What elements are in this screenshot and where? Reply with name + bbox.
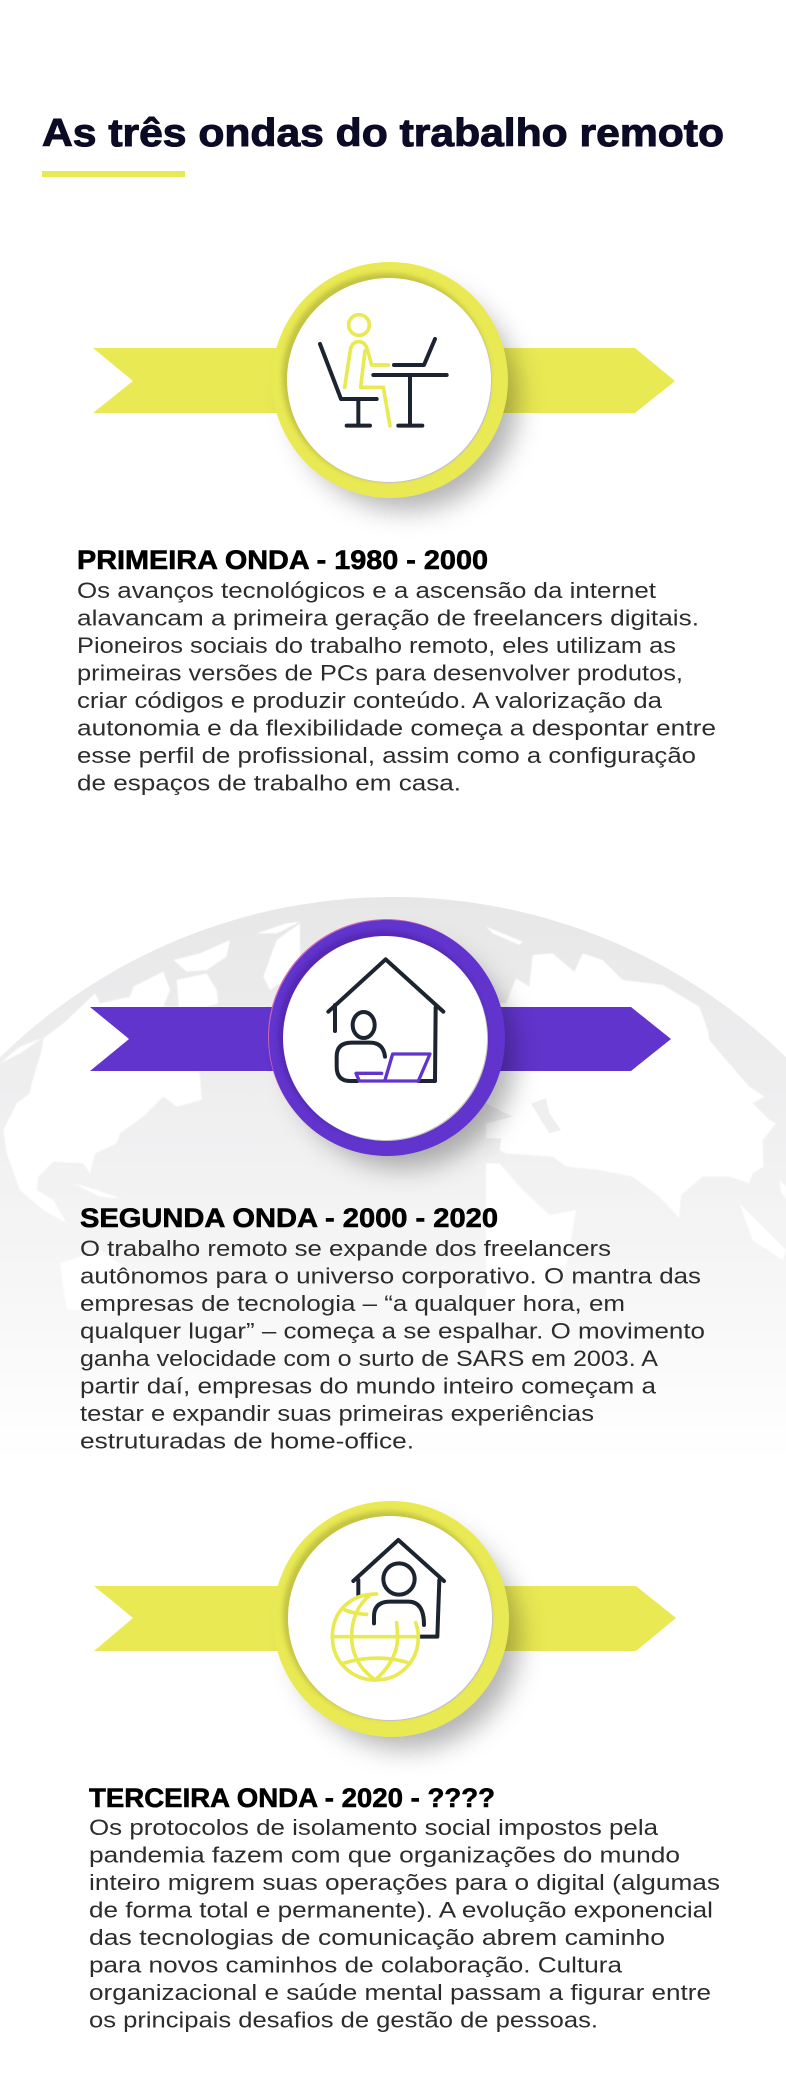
text block: primeira onda: Pioneiros sociais do trabalho remoto, eles utilizam as xyxy=(77,633,676,658)
text block: segunda onda: qualquer lugar” – começa a se espalhar. O movimento xyxy=(80,1318,705,1344)
text block: terceira onda: pandemia fazem com que organizações do mundo xyxy=(89,1842,680,1868)
badge: segunda onda xyxy=(268,919,515,1168)
text block: terceira onda: para novos caminhos de colaboração. Cultura xyxy=(89,1952,623,1978)
text block: segunda onda: partir daí, empresas do mundo inteiro começam a xyxy=(80,1374,657,1398)
text block: primeira onda: autonomia e da flexibilidade começa a despontar entre xyxy=(77,716,716,740)
text block: primeira onda: de espaços de trabalho em casa. xyxy=(77,770,461,796)
title: As três ondas do trabalho remoto xyxy=(42,112,724,155)
badge: primeira onda xyxy=(272,262,518,510)
text block: terceira onda xyxy=(89,1815,720,2032)
panel: segunda onda xyxy=(80,919,705,1454)
text block: segunda onda: O trabalho remoto se expande dos freelancers xyxy=(80,1236,611,1261)
icon: person at desk with laptop xyxy=(320,315,447,426)
text block: primeira onda: criar códigos e produzir conteúdo. A valorização da xyxy=(77,688,663,713)
background: world globe xyxy=(0,897,786,1294)
title underline xyxy=(42,171,185,177)
text block: terceira onda: organizacional e saúde mental passam a figurar entre xyxy=(89,1980,711,2005)
icon: house, person and globe xyxy=(332,1540,444,1680)
ribbon arrow: segunda onda xyxy=(90,1007,671,1071)
text block: segunda onda: ganha velocidade com o surto de SARS em 2003. A xyxy=(80,1346,658,1371)
text block: terceira onda: de forma total e permanente). A evolução exponencial xyxy=(89,1898,713,1922)
icon: person with laptop in house xyxy=(328,959,443,1081)
badge: terceira onda xyxy=(273,1501,519,1749)
text block: primeira onda: Os avanços tecnológicos e a ascensão da internet xyxy=(77,578,656,603)
text block: segunda onda: empresas de tecnologia – “a qualquer hora, em xyxy=(80,1291,625,1316)
panel: primeira onda xyxy=(77,262,716,796)
text block: segunda onda: autônomos para o universo corporativo. O mantra das xyxy=(80,1264,701,1288)
ribbon arrow: primeira onda xyxy=(93,348,675,413)
text block: terceira onda: os principais desafios de gestão de pessoas. xyxy=(89,2008,598,2032)
text block: terceira onda: das tecnologias de comunicação abrem caminho xyxy=(89,1925,665,1950)
heading: primeira onda: PRIMEIRA ONDA - 1980 - 2000 xyxy=(77,545,488,575)
text block: primeira onda: esse perfil de profissional, assim como a configuração xyxy=(77,743,696,768)
text block: terceira onda: inteiro migrem suas operações para o digital (algumas xyxy=(89,1870,720,1895)
text block: primeira onda: primeiras versões de PCs para desenvolver produtos, xyxy=(77,660,683,686)
text block: terceira onda: Os protocolos de isolamento social impostos pela xyxy=(89,1815,659,1840)
text block: segunda onda: estruturadas de home-office. xyxy=(80,1428,414,1454)
text block: segunda onda: testar e expandir suas primeiras experiências xyxy=(80,1401,594,1426)
text block: primeira onda: alavancam a primeira geração de freelancers digitais. xyxy=(77,606,699,630)
heading: terceira onda: TERCEIRA ONDA - 2020 - ???? xyxy=(89,1783,495,1813)
panel: terceira onda xyxy=(89,1501,720,2032)
text block: segunda onda xyxy=(80,1236,705,1454)
ribbon arrow: terceira onda xyxy=(94,1586,676,1651)
text block: primeira onda xyxy=(77,578,716,796)
heading: segunda onda: SEGUNDA ONDA - 2000 - 2020 xyxy=(80,1203,498,1233)
